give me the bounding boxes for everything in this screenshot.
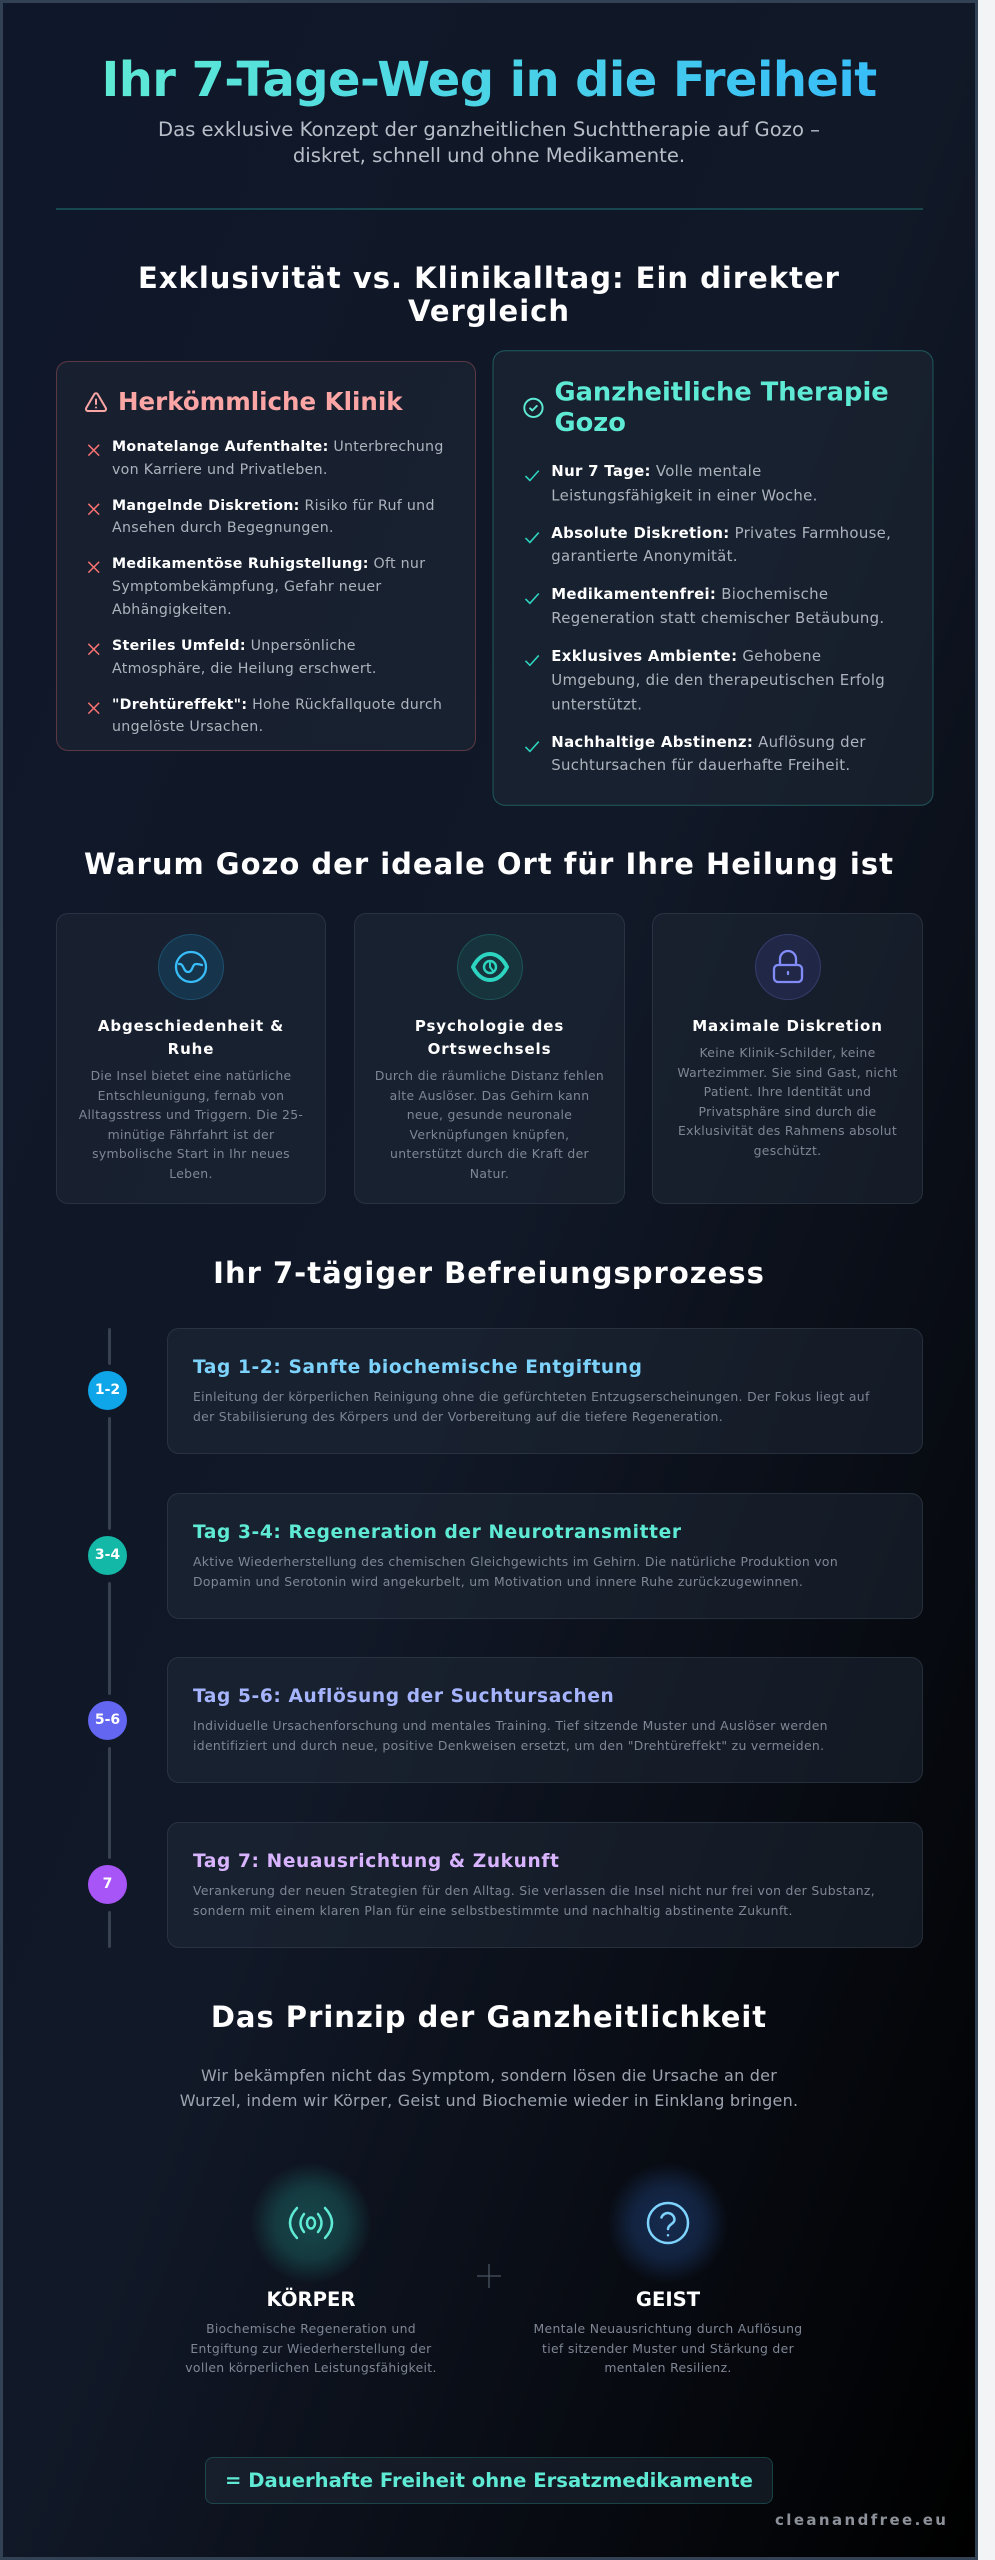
list: therapy benefits: Nur 7 Tage: Volle mentale xyxy=(551,464,761,480)
icon: warning triangle xyxy=(84,392,108,412)
list: therapy benefits: Nachhaltige Abstinenz: Auflösung der xyxy=(551,734,865,751)
list: therapy benefits: Regeneration statt chemischer Betäubung. xyxy=(551,611,884,627)
subtitle xyxy=(158,118,820,167)
list: clinic drawbacks: Ansehen durch Begegnungen. xyxy=(112,520,334,536)
subtitle: diskret, schnell und ohne Medikamente. xyxy=(293,144,685,167)
pillar text xyxy=(534,2321,802,2375)
card text: Durch die räumliche Distanz fehlen xyxy=(375,1068,604,1083)
card: seclusion and calm xyxy=(56,913,326,1204)
timeline card: day 5-6 xyxy=(167,1657,923,1783)
card title: Ruhe xyxy=(168,1040,214,1058)
icon: mind glow with question mark xyxy=(603,2158,733,2288)
step text xyxy=(193,1554,838,1589)
header: title and subtitle xyxy=(101,52,877,167)
card text: Natur. xyxy=(470,1166,509,1181)
card text xyxy=(78,1068,303,1181)
timeline card: day 3-4 xyxy=(167,1493,923,1619)
list: therapy benefits: garantierte Anonymität. xyxy=(551,549,737,566)
pillar title: GEIST xyxy=(636,2288,700,2311)
timeline marker: day 7: 7 xyxy=(103,1876,112,1892)
icon: check circle xyxy=(523,398,544,418)
timeline card: day 7 xyxy=(167,1822,923,1948)
card text: Leben. xyxy=(169,1166,213,1181)
list: clinic drawbacks: Atmosphäre, die Heilung erschwert. xyxy=(112,661,377,677)
plus sign xyxy=(477,2264,501,2288)
step text: Aktive Wiederherstellung des chemischen Gleichgewichts im Gehirn. Die natürliche Produktion von xyxy=(193,1554,838,1569)
step title: Tag 3-4: Regeneration der Neurotransmitter xyxy=(193,1522,682,1543)
card text xyxy=(375,1068,604,1181)
card text: minütige Fährfahrt ist der xyxy=(108,1127,274,1142)
intro text: Wurzel, indem wir Körper, Geist und Biochemie wieder in Einklang bringen. xyxy=(180,2090,798,2110)
card title: Abgeschiedenheit & xyxy=(98,1017,284,1035)
pillar: mind xyxy=(534,2167,802,2375)
card title: Ortswechsels xyxy=(428,1040,551,1058)
card title xyxy=(415,1017,564,1058)
result box: = Dauerhafte Freiheit ohne Ersatzmedikamente xyxy=(225,2469,753,2492)
list: clinic drawbacks xyxy=(88,439,444,735)
subtitle: Das exklusive Konzept der ganzheitlichen Suchttherapie auf Gozo – xyxy=(158,118,820,141)
list: therapy benefits: Absolute Diskretion: Privates Farmhouse, xyxy=(551,525,891,542)
card title: Psychologie des xyxy=(415,1017,564,1035)
heading: conventional clinic: Herkömmliche Klinik xyxy=(118,387,403,416)
card text: unterstützt durch die Kraft der xyxy=(390,1146,589,1161)
intro text: Wir bekämpfen nicht das Symptom, sondern lösen die Ursache an der xyxy=(201,2066,777,2085)
step text xyxy=(193,1718,828,1753)
list: therapy benefits: Leistungsfähigkeit in einer Woche. xyxy=(551,487,817,504)
result box xyxy=(205,2457,773,2504)
card text: geschützt. xyxy=(754,1143,821,1158)
card text: Alltagsstress und Triggern. Die 25- xyxy=(79,1107,303,1122)
card text xyxy=(677,1045,898,1158)
pillar text: Entgiftung zur Wiederherstellung der xyxy=(190,2341,432,2356)
card: maximum discretion xyxy=(652,913,923,1204)
card title: Maximale Diskretion xyxy=(692,1017,883,1035)
step title: Tag 1-2: Sanfte biochemische Entgiftung xyxy=(193,1357,643,1378)
card text: Verknüpfungen knüpfen, xyxy=(410,1127,569,1142)
heading: comparison: Exklusivität vs. Klinikalltag: Ein direkter xyxy=(138,261,840,295)
card title xyxy=(98,1017,284,1058)
card text: symbolische Start in Ihr neues xyxy=(92,1146,290,1161)
timeline marker: day 1-2 xyxy=(88,1371,127,1410)
list: clinic drawbacks: Mangelnde Diskretion: Risiko für Ruf und xyxy=(112,498,435,514)
pillar text: Mentale Neuausrichtung durch Auflösung xyxy=(534,2321,802,2336)
list: clinic drawbacks: Monatelange Aufenthalte: Unterbrechung xyxy=(112,439,444,455)
intro text xyxy=(180,2066,798,2110)
list: clinic drawbacks: Abhängigkeiten. xyxy=(112,602,232,618)
list: therapy benefits: Suchtursachen für dauerhafte Freiheit. xyxy=(551,758,850,775)
list: therapy benefits xyxy=(525,464,891,775)
card text: Entschleunigung, fernab von xyxy=(98,1088,284,1103)
list: clinic drawbacks: Medikamentöse Ruhigstellung: Oft nur xyxy=(112,556,425,572)
step text: sondern mit einem klaren Plan für eine selbstbestimmte und nachhaltig abstinente Zukunft. xyxy=(193,1903,793,1918)
heading: 7-day process: Ihr 7-tägiger Befreiungsprozess xyxy=(213,1256,765,1290)
step text xyxy=(193,1389,870,1424)
heading: comparison xyxy=(138,261,840,328)
icon: eye xyxy=(457,934,523,1000)
list: clinic drawbacks: ungelöste Ursachen. xyxy=(112,719,263,735)
pillar: body xyxy=(185,2168,437,2375)
heading: why Gozo: Warum Gozo der ideale Ort für Ihre Heilung ist xyxy=(84,847,894,881)
card text: Die Insel bietet eine natürliche xyxy=(91,1068,291,1083)
step text: Individuelle Ursachenforschung und mentales Training. Tief sitzende Muster und Auslöser werden xyxy=(193,1718,828,1733)
card text: Wartezimmer. Sie sind Gast, nicht xyxy=(677,1065,898,1080)
list: therapy benefits: Exklusives Ambiente: Gehobene xyxy=(551,648,821,665)
card text: Privatsphäre sind durch die xyxy=(698,1104,876,1119)
list: clinic drawbacks: Symptombekämpfung, Gefahr neuer xyxy=(112,579,382,595)
heading: holism principle: Das Prinzip der Ganzheitlichkeit xyxy=(211,2000,767,2034)
timeline marker: day 7 xyxy=(88,1865,127,1904)
step text: Verankerung der neuen Strategien für den Alltag. Sie verlassen die Insel nicht nur frei von der Substanz, xyxy=(193,1883,875,1898)
card text: alte Auslöser. Das Gehirn kann xyxy=(390,1088,589,1103)
card: psychology of relocation xyxy=(354,913,625,1204)
list: therapy benefits: Umgebung, die den therapeutischen Erfolg xyxy=(551,672,885,689)
timeline marker: day 5-6 xyxy=(88,1701,127,1740)
step text: Einleitung der körperlichen Reinigung ohne die gefürchteten Entzugserscheinungen. Der Fokus liegt auf xyxy=(193,1389,870,1404)
icon: wave in circle xyxy=(158,934,224,1000)
timeline marker: day 3-4 xyxy=(88,1536,127,1575)
card text: neue, gesunde neuronale xyxy=(407,1107,572,1122)
pillar text xyxy=(185,2321,437,2375)
list: therapy benefits: unterstützt. xyxy=(551,696,642,713)
card text: Exklusivität des Rahmens absolut xyxy=(678,1123,897,1138)
list: therapy benefits: Medikamentenfrei: Biochemische xyxy=(551,587,828,604)
icon: body glow with pulse xyxy=(246,2158,376,2288)
step text xyxy=(193,1883,875,1918)
pillar title: KÖRPER xyxy=(267,2288,355,2311)
list: clinic drawbacks: "Drehtüreffekt": Hohe Rückfallquote durch xyxy=(112,696,442,712)
watermark: cleanandfree.eu xyxy=(775,2511,948,2529)
card text: Patient. Ihre Identität und xyxy=(704,1084,871,1099)
panel: conventional clinic xyxy=(56,361,476,751)
timeline card: day 1-2 xyxy=(167,1328,923,1454)
list: clinic drawbacks: von Karriere und Privatleben. xyxy=(112,462,328,478)
pillar text: tief sitzender Muster und Stärkung der xyxy=(542,2341,794,2356)
card text: Keine Klinik-Schilder, keine xyxy=(699,1045,876,1060)
step text: Dopamin und Serotonin wird angekurbelt, um Motivation und innere Ruhe zurückzugewinnen. xyxy=(193,1574,803,1589)
panel: holistic therapy Gozo xyxy=(492,350,933,806)
heading: holistic therapy xyxy=(554,376,888,437)
step title: Tag 5-6: Auflösung der Suchtursachen xyxy=(193,1686,614,1707)
step title: Tag 7: Neuausrichtung & Zukunft xyxy=(193,1851,560,1872)
pillar text: mentalen Resilienz. xyxy=(604,2360,732,2375)
heading: comparison: Vergleich xyxy=(408,294,570,328)
timeline marker: day 3-4: 3-4 xyxy=(95,1547,120,1563)
heading: holistic therapy: Gozo xyxy=(554,406,625,437)
pillar text: Biochemische Regeneration und xyxy=(206,2321,416,2336)
timeline marker: day 1-2: 1-2 xyxy=(95,1382,120,1398)
step text: der Stabilisierung des Körpers und der Vorbereitung auf die tiefere Regeneration. xyxy=(193,1409,723,1424)
list: clinic drawbacks: Steriles Umfeld: Unpersönliche xyxy=(112,638,356,654)
icon: lock xyxy=(755,934,821,1000)
pillar text: vollen körperlichen Leistungsfähigkeit. xyxy=(185,2360,437,2375)
timeline marker: day 5-6: 5-6 xyxy=(95,1712,120,1728)
heading: holistic therapy: Ganzheitliche Therapie xyxy=(554,376,888,407)
title: Ihr 7-Tage-Weg in die Freiheit xyxy=(101,52,877,108)
step text: identifiziert und durch neue, positive Denkweisen ersetzt, um den "Drehtüreffekt" zu vermeiden. xyxy=(193,1738,824,1753)
